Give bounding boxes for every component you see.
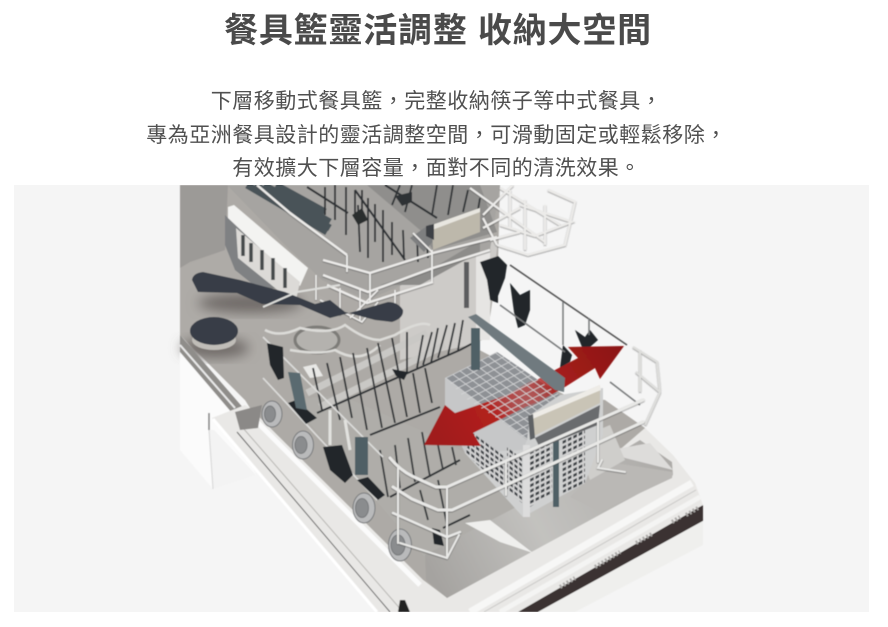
upper rack tines and handle xyxy=(227,185,500,300)
cutlery basket top grid xyxy=(445,352,560,440)
lower rack side wires xyxy=(500,265,660,425)
lower rack dark clips and posts xyxy=(267,256,598,546)
tub interior xyxy=(180,185,673,598)
open door xyxy=(212,405,703,612)
text block: description: 專為亞洲餐具設計的靈活調整空間，可滑動固定或輕鬆移除， xyxy=(146,124,727,146)
door well floor xyxy=(290,395,673,598)
spray arms xyxy=(190,272,403,350)
red arrow pointing front-left xyxy=(424,380,540,446)
red arrow pointing back-right xyxy=(507,346,624,407)
wheels xyxy=(262,401,412,561)
title: 餐具籃靈活調整 收納大空間 xyxy=(224,12,652,50)
upper rack wires xyxy=(257,185,575,322)
cutlery basket handles xyxy=(468,314,601,440)
cabinet side panel xyxy=(180,335,256,489)
panel: dishwasher photo illustration xyxy=(14,185,869,612)
cutlery basket body xyxy=(445,352,603,517)
rack rail xyxy=(228,205,308,300)
control panel strip xyxy=(518,505,703,612)
lower rack front wires xyxy=(390,400,643,558)
text block: description: 下層移動式餐具籃，完整收納筷子等中式餐具， xyxy=(211,90,662,113)
text block: description: 有效擴大下層容量，面對不同的清洗效果。 xyxy=(232,157,641,180)
text block: description xyxy=(146,90,727,180)
lower rack back wires and tines xyxy=(263,285,475,528)
